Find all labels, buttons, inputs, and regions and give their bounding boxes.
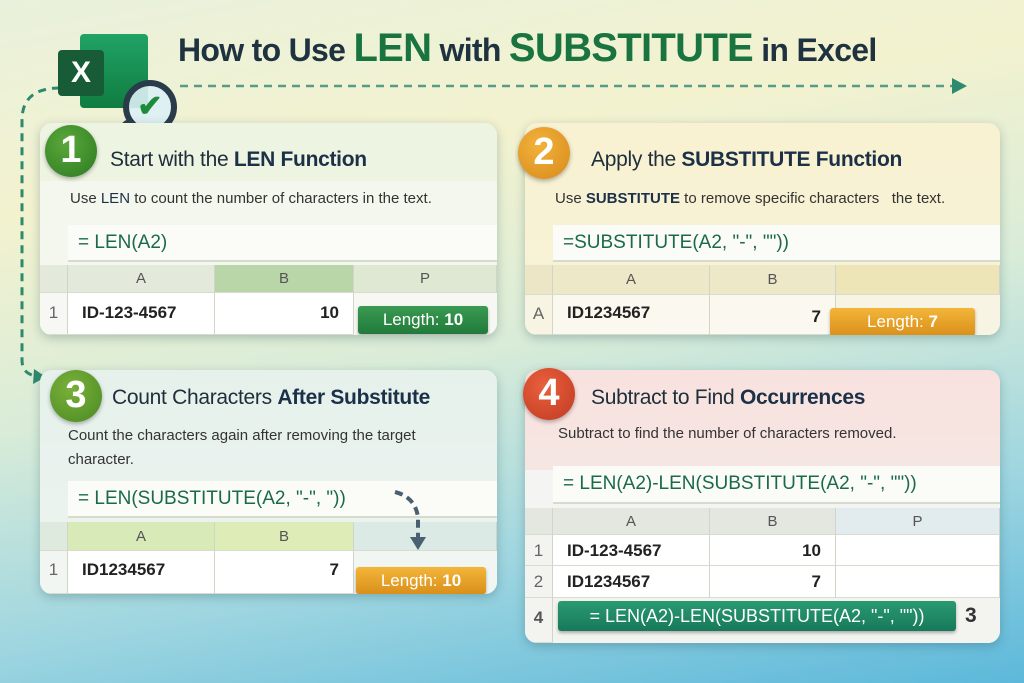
formula bar 3 — [68, 481, 498, 518]
badge 4: 4 — [538, 372, 560, 414]
icon: excel with magnifier: X — [71, 56, 91, 89]
badge 1: 1 — [60, 129, 82, 171]
table 3: 7 — [330, 560, 339, 579]
table 2 — [525, 265, 1000, 335]
table 2: A — [533, 304, 544, 323]
badge 3: 3 — [65, 374, 87, 416]
formula bar 2 — [553, 225, 1000, 262]
description 1: Use LEN to count the number of characters in the text. — [70, 190, 432, 207]
formula bar 4 — [553, 466, 1000, 504]
green formula result — [558, 601, 956, 631]
table 4: A — [626, 513, 636, 530]
table 1: ID-123-4567 — [82, 303, 177, 322]
tag: length 10 orange: Length: 10 — [381, 571, 461, 590]
panel 2 — [525, 123, 1000, 335]
result 3: 3 — [965, 604, 977, 627]
tag: length 10 orange — [356, 567, 486, 594]
table 1: B — [279, 270, 289, 287]
table 2: ID1234567 — [567, 303, 650, 322]
icon: excel with magnifier: ✔ — [137, 90, 163, 123]
table 2: B — [767, 271, 778, 288]
panel 1 — [40, 123, 497, 335]
table 3: ID1234567 — [82, 560, 165, 579]
panel 3 — [40, 370, 497, 594]
formula bar 4: = LEN(A2)-LEN(SUBSTITUTE(A2, "-", "")) — [563, 473, 917, 494]
title 4: Subtract to Find Occurrences — [591, 386, 865, 409]
table 1: A — [136, 270, 146, 287]
table 1: 10 — [320, 303, 339, 322]
description 2: Use SUBSTITUTE to remove specific characters the text. — [555, 190, 945, 207]
table 4: ID1234567 — [567, 572, 650, 591]
table 1 — [40, 265, 497, 335]
table 2: 7 — [812, 307, 821, 326]
icon: excel with magnifier — [58, 34, 177, 123]
table 3: B — [279, 528, 289, 545]
title 1: Start with the LEN Function — [110, 148, 367, 171]
green formula result: = LEN(A2)-LEN(SUBSTITUTE(A2, "-", "")) — [589, 606, 925, 626]
table 4: 2 — [534, 572, 543, 591]
table 4: ID-123-4567 — [567, 541, 662, 560]
formula bar 2: =SUBSTITUTE(A2, "-", "")) — [563, 232, 789, 253]
description 3: Count the characters again after removing the target character. — [68, 427, 416, 468]
table 4: 1 — [534, 541, 543, 560]
table 3: A — [136, 528, 146, 545]
title 2: Apply the SUBSTITUTE Function — [591, 148, 902, 171]
table 4: B — [767, 513, 778, 530]
badge 3 — [50, 370, 102, 422]
table 1: 1 — [49, 303, 58, 322]
tag: length 7 — [830, 308, 975, 336]
badge 4 — [523, 368, 575, 420]
table 4: 7 — [812, 572, 821, 591]
table 4 — [525, 508, 1000, 643]
table 3 — [40, 522, 497, 594]
tag: length 7: Length: 7 — [867, 312, 938, 331]
table 4: 4 — [534, 608, 543, 627]
tag: length 10 — [358, 306, 488, 334]
arrow: curved down — [394, 490, 426, 550]
table 2: A — [626, 271, 636, 288]
table 4: P — [912, 513, 922, 530]
formula bar 1 — [68, 225, 498, 262]
badge 1 — [45, 125, 97, 177]
formula bar 1: = LEN(A2) — [78, 232, 167, 253]
table 4: 10 — [802, 541, 821, 560]
title 3: Count Characters After Substitute — [112, 386, 430, 409]
formula bar 3: = LEN(SUBSTITUTE(A2, "-", ")) — [78, 488, 346, 509]
description 4: Subtract to find the number of characters removed. — [558, 425, 897, 442]
badge 2 — [518, 127, 570, 179]
table 3: 1 — [49, 560, 58, 579]
tag: length 10: Length: 10 — [383, 310, 463, 329]
table 1: P — [420, 270, 430, 287]
panel 4 — [525, 370, 1000, 643]
title: How to Use LEN with SUBSTITUTE in Excel — [178, 26, 877, 70]
badge 2: 2 — [533, 131, 555, 173]
